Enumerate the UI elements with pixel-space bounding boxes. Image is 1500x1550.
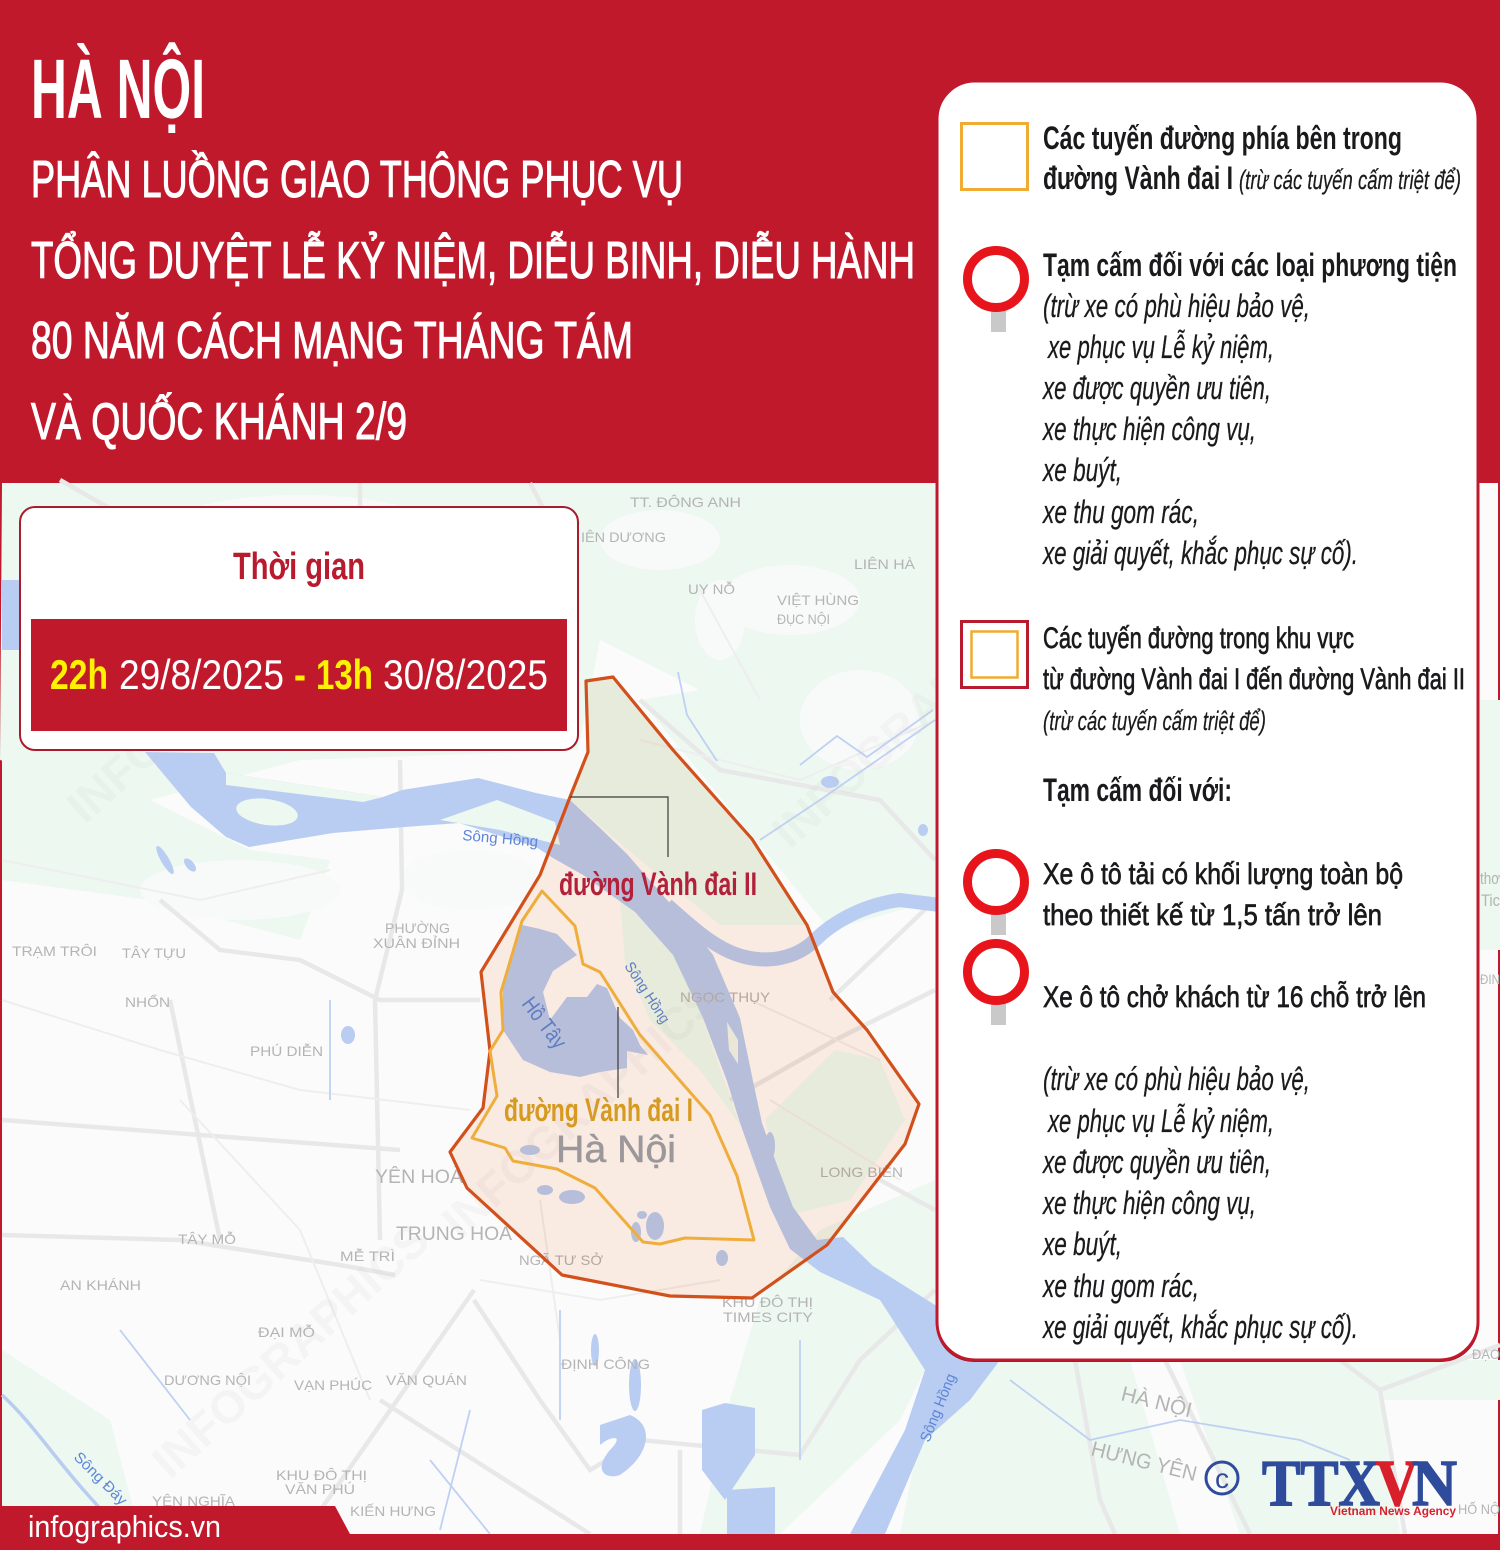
legend text: exceptions: xe thực hiện công vụ, [1042,1185,1256,1221]
subtitle lines: 80 NĂM CÁCH MẠNG THÁNG TÁM [31,312,633,370]
map: small lakes [154,776,928,1534]
time values: - [294,651,306,698]
map: place names: VĂN PHÚ [285,1481,355,1497]
legend item: passenger cars [968,944,1426,1025]
label: Hà Nội: Hà Nội [556,1129,676,1171]
map of Hanoi [0,480,1500,1534]
subtitle lines: VÀ QUỐC KHÁNH 2/9 [31,392,407,451]
ring II outline [450,677,919,1298]
subtitle lines [31,150,915,451]
map: place names: AN KHÁNH [60,1277,141,1293]
heading: Hà Nội: HÀ NỘI [31,42,205,136]
subtitle lines: PHÂN LUỒNG GIAO THÔNG PHỤC VỤ [31,150,683,209]
map: watermarks: INFOGRAPHICS [57,558,354,832]
icon: ban sign 2 [968,854,1024,935]
legend text: exceptions: xe phục vụ Lễ kỷ niệm, [1047,1103,1274,1139]
map: water labels [70,827,960,1509]
map: water labels: Sông Hồng [917,1371,960,1444]
map: watermarks: INFOGRAPHICS [762,583,1059,857]
ring road II zone [450,677,919,1298]
logo letters: N [1412,1447,1457,1520]
map: thin streams [120,672,1350,1534]
legend item: banned vehicles [968,247,1457,571]
map: place names: LIÊN HÀ [854,556,916,572]
legend item: banned vehicles: xe giải quyết, khắc phục sự cố). [1042,535,1358,571]
legend item: banned vehicles: (trừ xe có phù hiệu bảo vệ, [1043,288,1310,324]
legend item: banned vehicles: xe được quyền ưu tiên, [1042,370,1271,406]
map: watermarks: TTXVN [1172,668,1319,807]
icon: ban sign 3 [968,944,1024,1025]
map: watermarks: INFOGRAPHICS [1082,1023,1379,1297]
map: thin roads [2,590,935,1400]
map: place names: TRUNG HOÀ [396,1224,512,1245]
label: ring road II: đường Vành đai II [559,866,757,902]
map: watermarks [57,558,1379,1487]
map: place names: NGÃ TƯ SỞ [519,1251,603,1268]
map: place names: NHỔN [125,993,170,1010]
legend text: exceptions [1042,1061,1358,1345]
map: place names: VẠN PHÚC [294,1377,372,1393]
time values: 29/8/2025 [119,651,284,698]
legend text: exceptions: xe buýt, [1042,1226,1122,1262]
logo tagline: Vietnam News Agency [1330,1504,1456,1518]
time heading: Thời gian [233,546,365,588]
map: place names: ĐỊNH CÔNG [561,1356,650,1372]
legend item: banned vehicles: xe phục vụ Lễ kỷ niệm, [1047,329,1274,365]
logo: TTXVN [1206,1447,1457,1520]
legend item: ring I to ring II [962,622,1465,736]
map: place names: TT. ĐÔNG ANH [630,494,741,510]
map: place names: KIẾN HƯNG [350,1503,436,1519]
legend text: exceptions: xe được quyền ưu tiên, [1042,1144,1271,1180]
map: watermarks: INFOGRAPHICS [432,973,729,1247]
legend item: trucks [968,854,1403,935]
map: place names: VIỆT HÙNG [777,592,859,608]
time values: 30/8/2025 [383,651,548,698]
map: place names [12,494,1500,1519]
map: place names: XUÂN ĐỈNH [373,935,460,951]
map: place names: YÊN HOÀ [375,1166,463,1188]
legend item: banned vehicles: xe thu gom rác, [1042,494,1199,530]
map: West Lake (Hồ Tây) [503,925,648,1077]
map: place names: IÊN DƯƠNG [581,529,666,545]
map: place names: UY NỖ [688,580,735,597]
map: place names: PHƯỜNG [385,920,450,936]
legend item: banned vehicles: xe buýt, [1042,452,1122,488]
footer band [0,1506,1500,1550]
logo letters [1262,1447,1457,1520]
map: place names: ĐỤC NỘI [777,611,830,627]
map: water labels: Sông Hồng [621,959,673,1027]
icon: ban sign 1 [968,250,1024,332]
icon: orange square [962,124,1028,190]
map: place names: DƯƠNG NỘI [164,1372,251,1388]
time box [20,507,578,750]
map: place names: VĂN QUÁN [386,1372,467,1388]
ring road I outline [472,891,754,1244]
map: place names: ĐẠI MỖ [258,1323,315,1340]
ring II fill [450,677,919,1298]
map: road network [2,480,1500,1534]
logo letters: TTX [1262,1447,1380,1520]
legend item: ring I to ring II: (trừ các tuyến cấm triệt để) [1043,706,1266,736]
map: place names: TÂY MỖ [178,1230,236,1247]
legend text: exceptions: xe giải quyết, khắc phục sự cố). [1042,1309,1358,1345]
header title block [31,42,915,451]
map: place names: NGỌC THỤY [680,989,771,1005]
legend text: exceptions: xe thu gom rác, [1042,1268,1199,1304]
copyright mark [1206,1462,1238,1494]
icon: double square [962,622,1028,688]
map: place names: YÊN NGHĨA [152,1493,236,1509]
map: place names: TÂY TỰU [122,945,186,961]
subtitle lines: TỔNG DUYỆT LỄ KỶ NIỆM, DIỄU BINH, DIỄU HÀNH [31,231,915,290]
logo letters: V [1376,1447,1418,1520]
label: ring road I: đường Vành đai I [504,1092,693,1128]
panel: legend [936,81,1479,1362]
copyright mark: c [1215,1463,1229,1494]
map: green zones inside ring road [570,677,905,1215]
legend heading: banned for: Tạm cấm đối với: [1043,772,1232,808]
map: river islands [226,773,738,1064]
leader line ring I [617,1007,619,1098]
legend panel shadow [936,83,1479,1362]
legend item: ring I to ring II: Các tuyến đường trong khu vực [1043,622,1354,655]
map: water labels: Sông Hồng [462,827,539,851]
panel: time [20,507,578,750]
footer site name: infographics.vn [28,1509,221,1544]
legend item: inside ring I: đường Vành đai I [1043,160,1233,196]
map: place names: KHU ĐÔ THỊ [276,1467,367,1483]
map: green areas [0,483,1500,1534]
time values: 13h [316,651,373,698]
map: place names: HÀ NỘI [1119,1383,1194,1422]
map: place names: LONG BIÊN [820,1164,903,1180]
map: place names: TIMES CITY [723,1309,814,1325]
legend item: trucks: Xe ô tô tải có khối lượng toàn bộ [1043,858,1403,891]
time values [50,651,548,698]
legend item: inside ring I [962,120,1461,196]
legend item: banned vehicles: xe thực hiện công vụ, [1042,411,1256,447]
map: place names: HƯNG YÊN [1089,1438,1199,1486]
legend text: exceptions: (trừ xe có phù hiệu bảo vệ, [1043,1061,1310,1097]
leader line ring II [570,797,668,857]
map: urban patches [140,495,920,920]
legend panel background [937,81,1478,1360]
map: place names: PHÚ DIỄN [250,1043,323,1059]
legend item: trucks: theo thiết kế từ 1,5 tấn trở lên [1043,899,1382,932]
map: watermarks: INFOGRAPHICS [142,1213,439,1487]
map: water labels: Sông Đáy [70,1449,131,1509]
map: place names: TRẠM TRÔI [12,943,97,959]
map: place names: MỄ TRÌ [340,1248,395,1264]
time values: 22h [50,651,108,698]
map: water labels: Hồ Tây [517,992,572,1053]
map: Red River [2,580,1000,1534]
map: place names: KHU ĐÔ THỊ [722,1294,813,1310]
time bar [31,619,567,731]
